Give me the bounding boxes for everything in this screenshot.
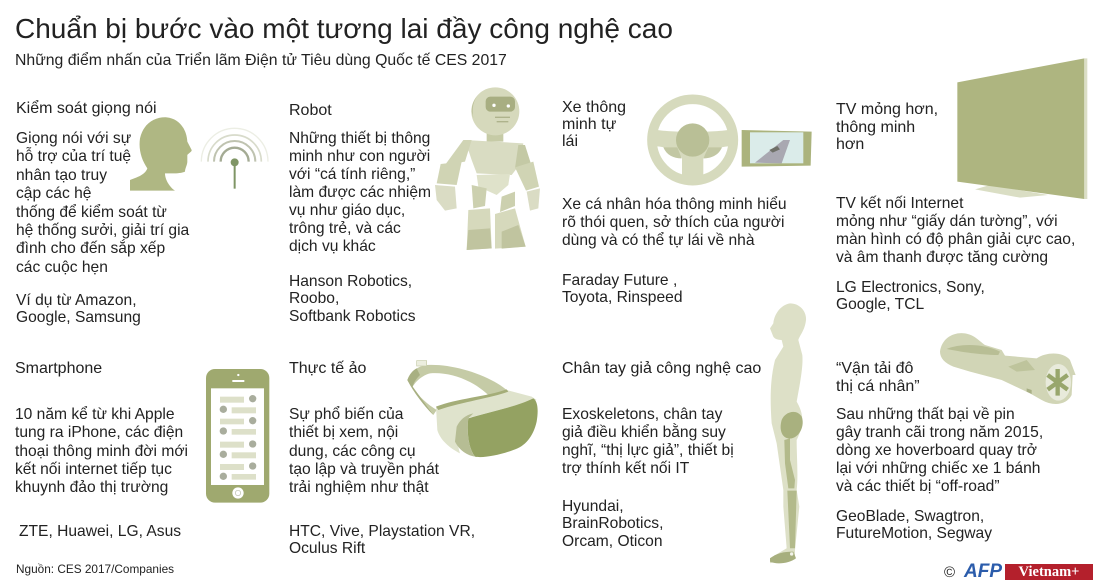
text: thinner TV body [836,195,1075,266]
title: Chuẩn bị bước vào một tương lai đầy công nghệ cao [15,13,673,44]
panel: robot [289,102,431,325]
text: prosthetics companies: Orcam, Oticon [562,533,663,550]
Vietnam+ logo: Vietnam+ [1019,564,1079,580]
source note: Nguồn: CES 2017/Companies [16,562,174,576]
panel: high-tech prosthetics [562,360,761,550]
heading: thinner TV [836,101,938,153]
text: urban transport body: lại với những chiếc xe 1 bánh [836,460,1040,477]
text: thinner TV body: và âm thanh được tăng cường [836,249,1048,266]
text: VR body: Sự phổ biến của [289,406,403,423]
icon: human figure with prosthetics [770,303,806,563]
text: VR body: thiết bị xem, nội [289,424,398,441]
text: urban transport body: và các thiết bị “off-road” [836,478,1000,495]
heading: prosthetics: Chân tay giả công nghệ cao [562,360,761,377]
text: voice control body: Giọng nói với sự [16,130,131,147]
text: VR body [289,406,439,496]
text: robot body: vụ như giáo dục, [289,202,405,219]
heading: personal urban transport: thị cá nhân” [836,378,920,395]
text: robot companies: Softbank Robotics [289,308,416,325]
text: self-driving companies: Faraday Future , [562,272,677,289]
logo: AFP and Vietnam+ credit [944,561,1093,582]
icon: head silhouette [130,117,192,191]
text: voice control body: hỗ trợ của trí tuệ [16,148,131,165]
text: VR body: trải nghiệm như thật [289,479,429,496]
text: robot body: trông trẻ, và các [289,220,401,237]
text: smartphone body: khuynh đảo thị trường [15,479,168,496]
panel: self-driving car [562,99,787,306]
heading: voice control: Kiểm soát giọng nói [16,100,157,117]
text: VR body: tạo lập và truyền phát [289,461,439,478]
text: voice control companies: Google, Samsung [16,309,141,326]
text: prosthetics body: nghĩ, “thị lực giả”, thiết bị [562,442,734,459]
text: urban transport companies: FutureMotion, Segway [836,525,992,542]
text: urban transport body: dòng xe hoverboard quay trở [836,442,1037,459]
icon: wireless antenna [201,128,268,189]
text: self-driving companies: Toyota, Rinspeed [562,289,682,306]
text: prosthetics body: Exoskeletons, chân tay [562,406,722,423]
text: voice control body: thống để kiểm soát từ [16,204,167,221]
text: prosthetics body [562,406,734,477]
heading: self-driving car: minh tự [562,116,616,133]
text: VR companies: Oculus Rift [289,540,365,557]
text: robot body: minh như con người [289,148,430,165]
text: voice control companies: Ví dụ từ Amazon, [16,292,137,309]
text: smartphone body: tung ra iPhone, các điện [15,424,183,441]
text: robot body: dịch vụ khác [289,238,376,255]
text: self-driving body: dùng và có thể tự lái về nhà [562,232,754,249]
text: voice control body [16,130,190,276]
text: smartphone body: thoại thông minh đời mới [15,443,188,460]
text: smartphone body [15,406,188,496]
heading: self-driving car [562,99,626,150]
icon: robot [435,87,540,250]
panel: voice control [16,100,190,326]
text: voice control body: cập các hệ [16,185,91,202]
text: voice control body: nhân tạo truy [16,167,107,184]
text: self-driving companies [562,272,682,306]
text: urban transport body [836,406,1043,495]
text: prosthetics body: giả điều khiển bằng suy [562,424,726,441]
text: robot companies: Roobo, [289,290,339,307]
heading: smartphone: Smartphone [15,360,102,377]
text: thinner TV body: mỏng như “giấy dán tường”, với [836,213,1058,230]
text: self-driving body: Xe cá nhân hóa thông minh hiểu [562,196,787,213]
text: prosthetics companies: Hyundai, [562,498,624,515]
text: robot body [289,130,431,255]
panel: virtual reality [289,360,475,557]
text: voice control body: các cuộc hẹn [16,259,108,276]
heading: personal urban transport [836,360,920,395]
text: urban transport companies: GeoBlade, Swagtron, [836,508,984,525]
panel: smartphone [15,360,188,540]
text: urban transport body: Sau những thất bại về pin [836,406,1015,423]
text: smartphone body: 10 năm kể từ khi Apple [15,406,175,423]
text: voice control companies [16,292,141,326]
heading: self-driving car: Xe thông [562,99,626,116]
copyright symbol: © [944,564,955,581]
text: robot body: với “cá tính riêng,” [289,166,415,183]
text: robot body: Những thiết bị thông [289,130,430,147]
panel: personal urban transport [836,360,1043,542]
icon: steering wheel [652,99,733,183]
text: smartphone body: kết nối internet tiếp tục [15,461,172,478]
text: prosthetics body: trợ thính kết nối IT [562,460,689,477]
text: self-driving body [562,196,787,249]
heading: thinner TV: TV mỏng hơn, [836,101,938,118]
text: robot companies [289,273,416,325]
panel: thinner TV [836,101,1075,313]
icon: television [957,58,1087,199]
text: self-driving body: rõ thói quen, sở thích của người [562,214,784,231]
text: smartphone companies: ZTE, Huawei, LG, Asus [19,523,181,540]
text: thinner TV body: TV kết nối Internet [836,195,963,212]
heading: robot: Robot [289,102,332,119]
text: urban transport body: gây tranh cãi trong năm 2015, [836,424,1043,441]
AFP logo: AFP [964,561,1002,582]
text: prosthetics companies: BrainRobotics, [562,515,663,532]
text: urban transport companies [836,508,992,542]
text: VR companies [289,523,475,557]
icon: VR headset [407,361,538,457]
text: thinner TV companies: LG Electronics, Sony, [836,279,985,296]
Vietnam+ logo [1005,564,1093,580]
subtitle: Những điểm nhấn của Triển lãm Điện tử Tiêu dùng Quốc tế CES 2017 [15,52,507,69]
heading: thinner TV: thông minh [836,119,915,136]
text: voice control body: đình cho đến sắp xếp [16,240,165,257]
icon: smartphone [206,369,269,503]
heading: personal urban transport: “Vận tải đô [836,360,913,377]
text: voice control body: hệ thống sưởi, giải trí gia [16,222,189,239]
icon: hoverboard [940,333,1076,404]
text: VR companies: HTC, Vive, Playstation VR, [289,523,475,540]
text: VR body: dung, các công cụ [289,443,416,460]
text: prosthetics companies [562,498,663,550]
text: robot companies: Hanson Robotics, [289,273,412,290]
icon: in-car screen [742,130,812,167]
text: robot body: làm được các nhiệm [289,184,431,201]
text: thinner TV body: màn hình có độ phân giải cực cao, [836,231,1075,248]
text: thinner TV companies [836,279,985,313]
heading: virtual reality: Thực tế ảo [289,360,366,377]
heading: self-driving car: lái [562,133,578,150]
text: thinner TV companies: Google, TCL [836,296,924,313]
heading: thinner TV: hơn [836,136,864,153]
